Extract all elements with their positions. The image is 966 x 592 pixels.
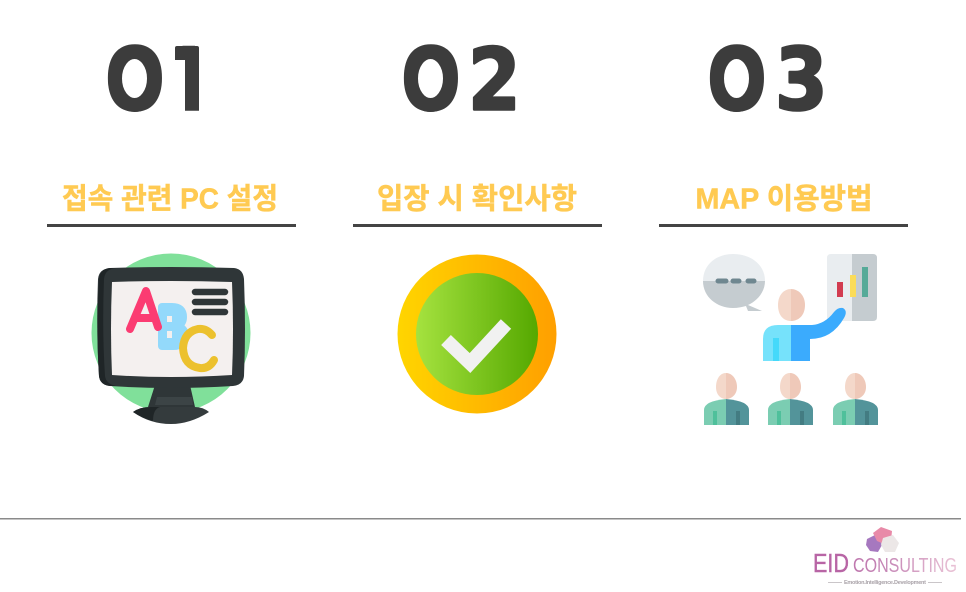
- number 03: 0: [707, 30, 767, 130]
- tagline rules: [828, 582, 942, 584]
- number 03: [707, 30, 828, 131]
- heading underline 3: [659, 224, 908, 227]
- logo tagline: Emotion.Intelligence.Development: [844, 580, 926, 586]
- heading: entry checklist: 입장 시 확인사항: [377, 182, 577, 216]
- chart board: [827, 254, 877, 321]
- icon: computer monitor with ABC: [92, 254, 250, 424]
- footer divider line: [0, 518, 961, 520]
- number 01: 1: [165, 29, 210, 130]
- number 01: [105, 29, 217, 130]
- number 02: 2: [468, 31, 521, 131]
- logo: EID Consulting: [813, 527, 957, 586]
- heading underline 2: [353, 224, 602, 227]
- number 02: [401, 30, 521, 131]
- heading: MAP usage: MAP 이용방법: [696, 182, 872, 216]
- icon: presenter and audience: [703, 254, 878, 425]
- logo wordmark EID: EID: [813, 548, 849, 578]
- audience: [704, 373, 878, 425]
- number 02: 0: [401, 30, 461, 130]
- heading: PC settings: 접속 관련 PC 설정: [62, 182, 278, 216]
- presenter: [763, 289, 846, 361]
- heading underline 1: [47, 224, 296, 227]
- speech bubble: [703, 254, 765, 311]
- number 03: 3: [775, 31, 828, 131]
- icon: green check badge: [398, 254, 556, 414]
- logo mark: [866, 527, 899, 552]
- number 01: 0: [105, 30, 165, 130]
